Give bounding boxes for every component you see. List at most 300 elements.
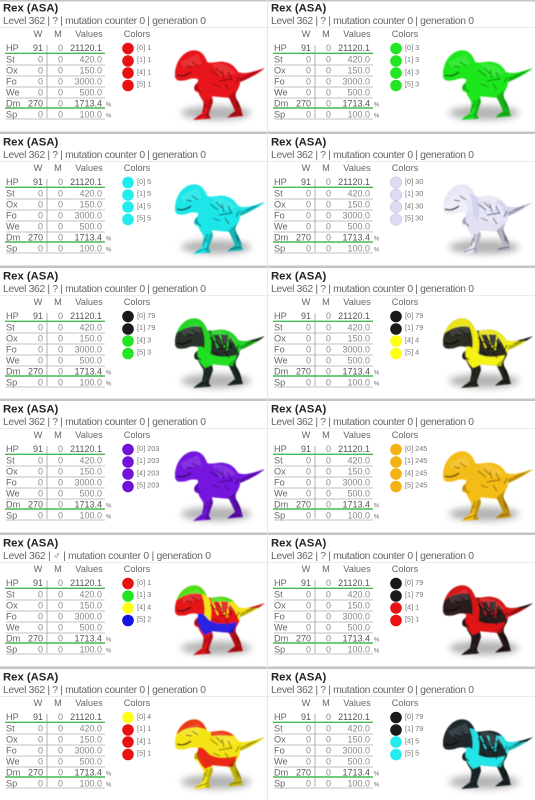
stat table: HP	[274, 444, 287, 454]
stat table: 0	[58, 734, 63, 744]
stat table: 0	[306, 756, 311, 766]
color swatches: [1] 203	[137, 456, 159, 465]
stat table: M	[322, 698, 330, 708]
stat table	[274, 297, 380, 388]
stat table: Dm	[274, 366, 289, 376]
stat table: 3000.0	[342, 612, 370, 622]
stat table: 500.0	[347, 222, 370, 232]
stat table: 0	[326, 500, 331, 510]
color swatches: [4] 1	[137, 68, 151, 76]
stat table: 1713.4	[74, 500, 102, 510]
color swatches	[122, 698, 151, 760]
title: Rex (ASA)	[271, 538, 326, 550]
stat table: 150.0	[79, 66, 102, 76]
stat table: Fo	[6, 612, 17, 622]
color swatches: [1] 245	[405, 456, 427, 465]
stat table: Values	[343, 698, 371, 708]
level line: Level 362 | ? | mutation counter 0 | generation 0	[271, 685, 474, 696]
stat table: 0	[306, 644, 311, 654]
stat table: St	[274, 724, 283, 734]
stat table: M	[54, 29, 62, 39]
stat table	[274, 698, 380, 788]
stat table: 270	[28, 634, 43, 644]
stat table: 0	[58, 622, 63, 632]
stat table: HP	[274, 311, 287, 321]
stat table: 0	[58, 478, 63, 488]
stat table: 0	[306, 600, 311, 610]
stat table: 0	[38, 222, 43, 232]
color swatches: [1] 30	[405, 189, 423, 198]
stat table: 150.0	[79, 200, 102, 210]
stat table: Dm	[6, 232, 21, 242]
stat table: 0	[38, 510, 43, 520]
stat table: %	[374, 102, 380, 108]
stat table: We	[274, 756, 288, 766]
stat table: HP	[274, 177, 287, 187]
color swatches: [5] 30	[405, 214, 423, 222]
stat table: M	[54, 698, 62, 708]
stat table: 91	[301, 444, 311, 454]
color swatches: [4] 245	[405, 468, 427, 478]
stat table: %	[374, 648, 380, 654]
color swatches: Colors	[392, 430, 419, 440]
stat table: 0	[58, 88, 63, 98]
stat table: 0	[306, 724, 311, 734]
color swatches: Colors	[392, 698, 419, 708]
stat table: 0	[326, 98, 331, 108]
color swatches: [1] 1	[137, 724, 151, 733]
stat table: W	[34, 163, 43, 173]
color swatches: [0] 4	[137, 712, 151, 721]
stat table: 100.0	[347, 110, 370, 120]
stat table: 0	[58, 54, 63, 64]
color swatches: [5] 1	[137, 80, 151, 88]
color swatches: [5] 5	[137, 214, 151, 222]
stat table: %	[106, 248, 112, 254]
stat table: HP	[6, 177, 19, 187]
color swatches: [0] 1	[137, 578, 151, 587]
stat table: 0	[306, 466, 311, 476]
level line: Level 362 | ? | mutation counter 0 | generation 0	[3, 417, 206, 428]
stat table: 0	[38, 244, 43, 254]
stat table: HP	[6, 444, 19, 454]
level line: Level 362 | ? | mutation counter 0 | generation 0	[271, 150, 474, 161]
level line: Level 362 | ? | mutation counter 0 | generation 0	[3, 16, 206, 27]
stat table: M	[322, 163, 330, 173]
stat table: 0	[306, 510, 311, 520]
stat table: 0	[306, 322, 311, 332]
stat table: 0	[306, 778, 311, 788]
stat table: 0	[326, 612, 331, 622]
stat table: Ox	[274, 600, 286, 610]
stat table: 0	[326, 311, 331, 321]
stat table: 21120.1	[338, 712, 370, 722]
color swatches: [0] 245	[405, 444, 427, 453]
stat table	[274, 564, 380, 654]
stat table: St	[6, 54, 15, 64]
stat table: 0	[58, 311, 63, 321]
panel: red rex	[0, 2, 267, 120]
stat table: 0	[38, 356, 43, 366]
stat table: %	[374, 382, 380, 388]
stat table: 0	[306, 188, 311, 198]
stat table: Fo	[6, 746, 17, 756]
stat table: Ox	[274, 66, 286, 76]
stat table: %	[374, 114, 380, 120]
stat table: 100.0	[347, 378, 370, 388]
stat table: 0	[58, 222, 63, 232]
stat table: 420.0	[79, 188, 102, 198]
color swatches: [1] 3	[137, 590, 151, 599]
stat table: Values	[75, 698, 103, 708]
stat table: We	[6, 622, 20, 632]
stat table: St	[6, 724, 15, 734]
stat table: Ox	[6, 734, 18, 744]
stat table: 0	[306, 622, 311, 632]
stat table: 0	[326, 188, 331, 198]
stat table: 500.0	[347, 88, 370, 98]
stat table: 420.0	[79, 54, 102, 64]
stat table: 0	[58, 500, 63, 510]
stat table: 0	[38, 378, 43, 388]
stat table: 0	[38, 478, 43, 488]
stat table: 91	[33, 43, 43, 53]
stat table: 0	[58, 334, 63, 344]
stat table: %	[106, 370, 112, 376]
stat table: 0	[326, 76, 331, 86]
stat table: 0	[58, 600, 63, 610]
stat table: 0	[58, 177, 63, 187]
stat table: %	[106, 114, 112, 120]
stat table: 0	[38, 210, 43, 220]
stat table: Values	[343, 564, 371, 574]
stat table: 0	[306, 66, 311, 76]
stat table: 0	[58, 43, 63, 53]
stat table: St	[6, 590, 15, 600]
color swatches: [4] 3	[137, 336, 151, 344]
stat table: 21120.1	[338, 311, 370, 321]
panel: purple rex	[0, 404, 267, 521]
title: Rex (ASA)	[271, 404, 326, 416]
stat table: 0	[38, 322, 43, 332]
color swatches: [1] 79	[405, 590, 423, 599]
stat table: M	[54, 564, 62, 574]
stat table: 0	[58, 612, 63, 622]
stat table: Sp	[6, 110, 17, 120]
stat table: 0	[326, 712, 331, 722]
stat table: 0	[58, 724, 63, 734]
stat table: 420.0	[79, 456, 102, 466]
stat table: 1713.4	[74, 768, 102, 778]
panel: gold rex	[268, 404, 535, 521]
stat table: We	[6, 88, 20, 98]
color swatches	[122, 163, 151, 225]
stat table: HP	[274, 43, 287, 53]
stat table: 0	[326, 444, 331, 454]
stat table: 420.0	[347, 322, 370, 332]
stat table: %	[106, 648, 112, 654]
color swatches: [5] 3	[405, 80, 419, 88]
stat table: 1713.4	[74, 232, 102, 242]
stat table: 0	[326, 200, 331, 210]
color swatches: [4] 203	[137, 468, 159, 478]
stat table: 0	[326, 222, 331, 232]
stat table: We	[274, 488, 288, 498]
stat table: 0	[58, 232, 63, 242]
stat table: 500.0	[79, 756, 102, 766]
stat table: St	[6, 456, 15, 466]
stat table: 270	[28, 232, 43, 242]
stat table: St	[6, 322, 15, 332]
stat table: 0	[38, 188, 43, 198]
stat table: 0	[38, 466, 43, 476]
stat table: Values	[75, 29, 103, 39]
stat table: M	[322, 564, 330, 574]
stat table: 0	[58, 712, 63, 722]
color swatches: [5] 203	[137, 480, 159, 490]
stat table: 150.0	[79, 466, 102, 476]
stat table: 0	[306, 54, 311, 64]
stat table: 0	[58, 590, 63, 600]
stat table: %	[106, 102, 112, 108]
stat table: 0	[58, 110, 63, 120]
stat table: 0	[38, 344, 43, 354]
color swatches: [5] 1	[405, 614, 419, 624]
color swatches: [5] 3	[137, 348, 151, 356]
stat table: 91	[33, 177, 43, 187]
stat table: 21120.1	[338, 444, 370, 454]
dinosaur: cyan	[173, 183, 266, 254]
stat table: 270	[28, 366, 43, 376]
stat table: 0	[38, 622, 43, 632]
stat table: HP	[6, 578, 19, 588]
stat table: 0	[58, 444, 63, 454]
stat table: 0	[58, 466, 63, 476]
stat table: 150.0	[347, 466, 370, 476]
stat table: 0	[306, 488, 311, 498]
stat table: 91	[33, 444, 43, 454]
stat table: Values	[343, 297, 371, 307]
stat table: Sp	[274, 510, 285, 520]
stat table: Fo	[6, 478, 17, 488]
title: Rex (ASA)	[3, 270, 58, 282]
level line: Level 362 | ? | mutation counter 0 | generation 0	[3, 284, 206, 295]
color swatches: [4] 5	[405, 736, 419, 746]
stat table: 420.0	[347, 724, 370, 734]
stat table: Ox	[6, 66, 18, 76]
stat table: Sp	[274, 378, 285, 388]
color swatches: [4] 1	[405, 602, 419, 612]
stat table: W	[34, 29, 43, 39]
stat table: 0	[326, 590, 331, 600]
stat table: 0	[326, 366, 331, 376]
stat table: 0	[306, 110, 311, 120]
stat table: 3000.0	[342, 344, 370, 354]
color swatches: [0] 79	[405, 578, 423, 587]
stat table: 91	[301, 712, 311, 722]
color swatches: [4] 5	[137, 202, 151, 210]
stat table: 0	[326, 634, 331, 644]
stat table: Dm	[6, 768, 21, 778]
stat table: 150.0	[79, 334, 102, 344]
stat table: Values	[75, 564, 103, 574]
stat table	[6, 163, 112, 254]
stat table: 100.0	[79, 378, 102, 388]
stat table: Sp	[6, 644, 17, 654]
dinosaur: lavender	[441, 183, 534, 254]
color swatches	[390, 698, 423, 760]
stat table: HP	[274, 712, 287, 722]
dinosaur: black and red	[441, 584, 534, 655]
color swatches: [0] 3	[405, 43, 419, 52]
stat table: 500.0	[347, 756, 370, 766]
stat table	[6, 297, 112, 388]
color swatches: [1] 79	[137, 323, 155, 332]
stat table: %	[106, 514, 112, 520]
stat table: 420.0	[347, 590, 370, 600]
stat table: 0	[38, 778, 43, 788]
stat table: 500.0	[79, 88, 102, 98]
stat table: We	[6, 756, 20, 766]
color swatches: [4] 30	[405, 202, 423, 210]
dinosaur: black and green	[173, 317, 266, 388]
stat table: 0	[38, 746, 43, 756]
stat table: 270	[296, 366, 311, 376]
stat table: M	[54, 430, 62, 440]
stat table: 3000.0	[342, 746, 370, 756]
stat table: 0	[58, 200, 63, 210]
stat table: %	[106, 638, 112, 644]
stat table: St	[6, 188, 15, 198]
stat table: St	[274, 456, 283, 466]
stat table: 500.0	[79, 356, 102, 366]
stat table: Ox	[6, 466, 18, 476]
stat table: 0	[326, 734, 331, 744]
stat table: 420.0	[347, 188, 370, 198]
stat table: 3000.0	[74, 478, 102, 488]
stat table: Sp	[6, 244, 17, 254]
stat table: 100.0	[79, 644, 102, 654]
panel: yellow and red rex	[0, 672, 267, 789]
stat table: 500.0	[79, 622, 102, 632]
color swatches: Colors	[124, 430, 151, 440]
stat table: 0	[306, 612, 311, 622]
stat table: Fo	[6, 344, 17, 354]
stat table: 21120.1	[338, 578, 370, 588]
title: Rex (ASA)	[271, 672, 326, 684]
stat table: 0	[326, 378, 331, 388]
stat table: 0	[326, 644, 331, 654]
stat table: Ox	[6, 334, 18, 344]
level line: Level 362 | ? | mutation counter 0 | generation 0	[271, 284, 474, 295]
stat table: 0	[326, 54, 331, 64]
stat table: 270	[296, 634, 311, 644]
color swatches	[122, 430, 159, 492]
stat table: HP	[6, 43, 19, 53]
stat table: 100.0	[79, 110, 102, 120]
stat table: %	[106, 236, 112, 242]
stat table: 1713.4	[342, 98, 370, 108]
stat table	[6, 564, 112, 654]
stat table	[6, 430, 112, 520]
stat table: Dm	[274, 232, 289, 242]
stat table: 91	[33, 712, 43, 722]
color swatches: Colors	[124, 698, 151, 708]
stat table: 0	[38, 734, 43, 744]
stat table: 0	[326, 724, 331, 734]
stat table: 91	[301, 43, 311, 53]
level line: Level 362 | ? | mutation counter 0 | generation 0	[271, 16, 474, 27]
stat table: 0	[306, 456, 311, 466]
stat table: 270	[28, 768, 43, 778]
stat table: 0	[58, 66, 63, 76]
stat table: 150.0	[347, 66, 370, 76]
stat table: 0	[58, 510, 63, 520]
color swatches: [5] 2	[137, 614, 151, 624]
stat table: 100.0	[79, 244, 102, 254]
stat table: 91	[301, 177, 311, 187]
stat table: %	[374, 248, 380, 254]
stat table: 0	[58, 322, 63, 332]
stat table: 0	[58, 634, 63, 644]
color swatches	[390, 564, 423, 626]
stat table: 0	[38, 88, 43, 98]
stat table: Sp	[274, 644, 285, 654]
stat table: 150.0	[347, 600, 370, 610]
stat table: 0	[326, 356, 331, 366]
stat table: Dm	[274, 768, 289, 778]
color swatches: [0] 79	[405, 712, 423, 721]
stat table: 0	[326, 344, 331, 354]
stat table: Sp	[6, 510, 17, 520]
stat table: 150.0	[347, 334, 370, 344]
color swatches	[122, 29, 151, 91]
stat table: 0	[38, 76, 43, 86]
stat table: 100.0	[347, 244, 370, 254]
stat table: M	[322, 29, 330, 39]
stat table: 0	[38, 600, 43, 610]
stat table: 0	[326, 756, 331, 766]
stat table: 0	[38, 66, 43, 76]
stat table: W	[302, 297, 311, 307]
color swatches: Colors	[124, 163, 151, 173]
stat table: Ox	[6, 200, 18, 210]
stat table: 0	[326, 322, 331, 332]
stat table: M	[322, 297, 330, 307]
stat table: 91	[33, 578, 43, 588]
stat table: 150.0	[79, 734, 102, 744]
dinosaur: red	[173, 49, 266, 120]
stat table: %	[374, 772, 380, 778]
stat table: 0	[58, 210, 63, 220]
stat table: 500.0	[347, 622, 370, 632]
stat table: St	[274, 188, 283, 198]
stat table: 100.0	[347, 778, 370, 788]
color swatches: [0] 203	[137, 444, 159, 453]
stat table: 0	[326, 43, 331, 53]
stat table: Sp	[274, 778, 285, 788]
stat table: 500.0	[79, 222, 102, 232]
stat table: 0	[38, 590, 43, 600]
stat table: 1713.4	[342, 232, 370, 242]
stat table: 420.0	[79, 322, 102, 332]
color swatches: [4] 4	[405, 336, 419, 344]
stat table: Dm	[6, 634, 21, 644]
stat table: St	[274, 590, 283, 600]
color swatches: [5] 5	[405, 748, 419, 758]
color swatches: [4] 3	[405, 68, 419, 76]
stat table: 0	[38, 456, 43, 466]
